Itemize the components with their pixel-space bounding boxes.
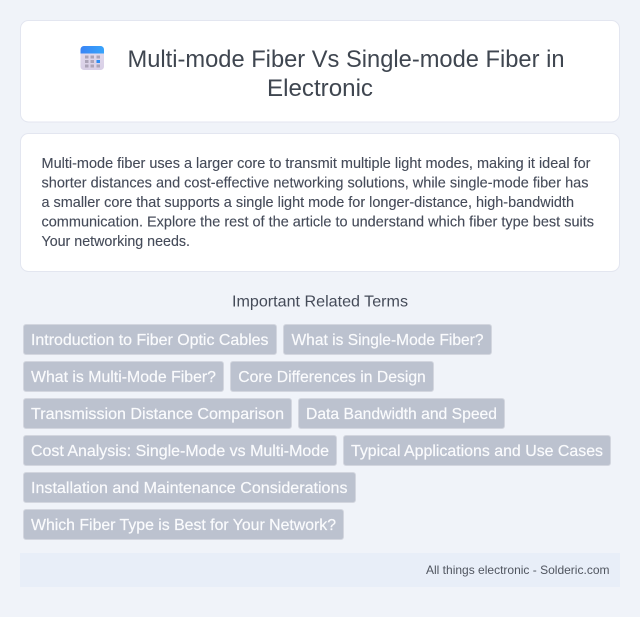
tag: Installation and Maintenance Considerations bbox=[31, 480, 348, 497]
tag: Introduction to Fiber Optic Cables bbox=[31, 332, 268, 349]
text block: summary paragraph: Your networking needs. bbox=[42, 234, 190, 250]
tag bbox=[24, 436, 336, 466]
tag bbox=[230, 362, 434, 392]
title bbox=[128, 46, 564, 102]
footer: All things electronic - Solderic.com bbox=[426, 563, 610, 577]
tag bbox=[284, 324, 492, 354]
tag bbox=[298, 398, 504, 428]
tag bbox=[24, 324, 276, 354]
tag: Which Fiber Type is Best for Your Network? bbox=[31, 517, 336, 534]
text block: summary paragraph: shorter distances and cost-effective networking solutions, while single-mode fiber has bbox=[42, 176, 588, 192]
text block: summary paragraph: communication. Explore the rest of the article to understand which fiber type best suits bbox=[42, 215, 594, 231]
text block: summary paragraph: a smaller core that supports a single light mode for longer-distance, high-bandwidth bbox=[42, 195, 574, 211]
tag: Cost Analysis: Single-Mode vs Multi-Mode bbox=[31, 443, 329, 460]
tag: Transmission Distance Comparison bbox=[31, 406, 284, 423]
tag: What is Multi-Mode Fiber? bbox=[31, 369, 216, 386]
tag: Core Differences in Design bbox=[238, 369, 426, 386]
tags: related terms bbox=[24, 324, 610, 540]
tag bbox=[24, 472, 356, 502]
tag bbox=[24, 362, 224, 392]
tag bbox=[24, 398, 292, 428]
tag bbox=[24, 510, 344, 540]
title: Electronic bbox=[267, 75, 373, 102]
heading: related terms: Important Related Terms bbox=[232, 294, 408, 310]
tag bbox=[344, 436, 610, 466]
tag: What is Single-Mode Fiber? bbox=[292, 332, 484, 349]
panel: summary bbox=[20, 134, 620, 272]
title: Multi-mode Fiber Vs Single-mode Fiber in bbox=[128, 46, 564, 73]
footer bbox=[20, 553, 620, 587]
text block: summary paragraph: Multi-mode fiber uses a larger core to transmit multiple light modes, making it ideal for bbox=[42, 156, 591, 172]
icon: calendar bbox=[80, 46, 104, 70]
tag: Data Bandwidth and Speed bbox=[306, 406, 497, 423]
panel: title card bbox=[20, 20, 620, 122]
tag: Typical Applications and Use Cases bbox=[351, 443, 603, 460]
text block: summary paragraph bbox=[42, 156, 594, 250]
